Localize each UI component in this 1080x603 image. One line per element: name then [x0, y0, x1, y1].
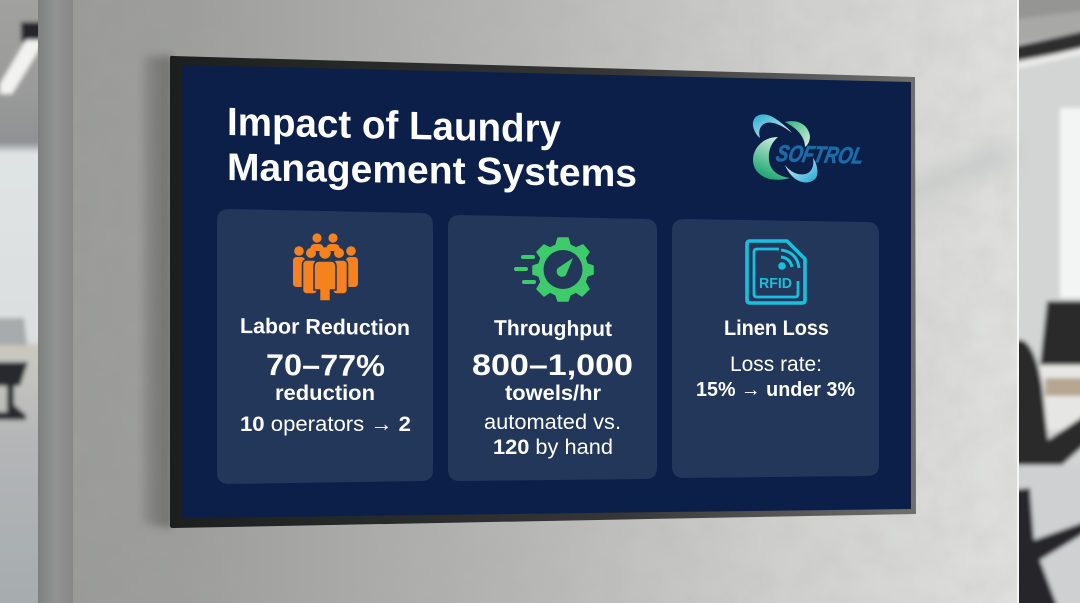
panel: linen loss [672, 219, 879, 478]
title: Management Systems [227, 146, 637, 196]
logo wordmark: SOFTROL [774, 140, 867, 169]
card background [672, 219, 879, 478]
logo swoosh: top blue [753, 114, 792, 138]
card background [217, 209, 433, 484]
heading: Labor Reduction [240, 314, 410, 340]
detail: 15% → under 3% [696, 378, 855, 401]
detail [484, 410, 621, 459]
panel: throughput [448, 215, 657, 481]
right office background [1010, 0, 1080, 603]
detail: automated vs. [484, 410, 621, 434]
icon: group of people [293, 233, 358, 301]
metric: 70–77% [266, 349, 385, 383]
title [227, 100, 637, 196]
heading: Linen Loss [724, 317, 829, 340]
icon: RFID tag [747, 241, 805, 303]
logo swoosh: top green [785, 121, 810, 147]
icon: RFID tag: RFID [759, 275, 792, 292]
panel: labor reduction [217, 209, 433, 484]
detail: 120 by hand [493, 435, 613, 459]
display frame [170, 56, 916, 528]
icon: speed gear [514, 238, 593, 301]
detail: 10 operators → 2 [240, 412, 411, 436]
detail [696, 353, 855, 401]
title: Impact of Laundry [227, 100, 561, 151]
logo swoosh: bottom blue [785, 158, 817, 182]
left office background [0, 0, 45, 603]
logo swoosh: left green [753, 137, 790, 180]
unit: towels/hr [505, 382, 601, 405]
unit: reduction [275, 382, 375, 405]
detail: Loss rate: [730, 353, 822, 376]
concrete pillar edge [38, 0, 73, 603]
wall shadow behind display [140, 56, 172, 528]
heading: Throughput [494, 316, 612, 341]
metric: 800–1,000 [472, 349, 633, 382]
logo: Softrol [753, 114, 867, 182]
display screen [182, 65, 911, 518]
card background [448, 215, 657, 481]
